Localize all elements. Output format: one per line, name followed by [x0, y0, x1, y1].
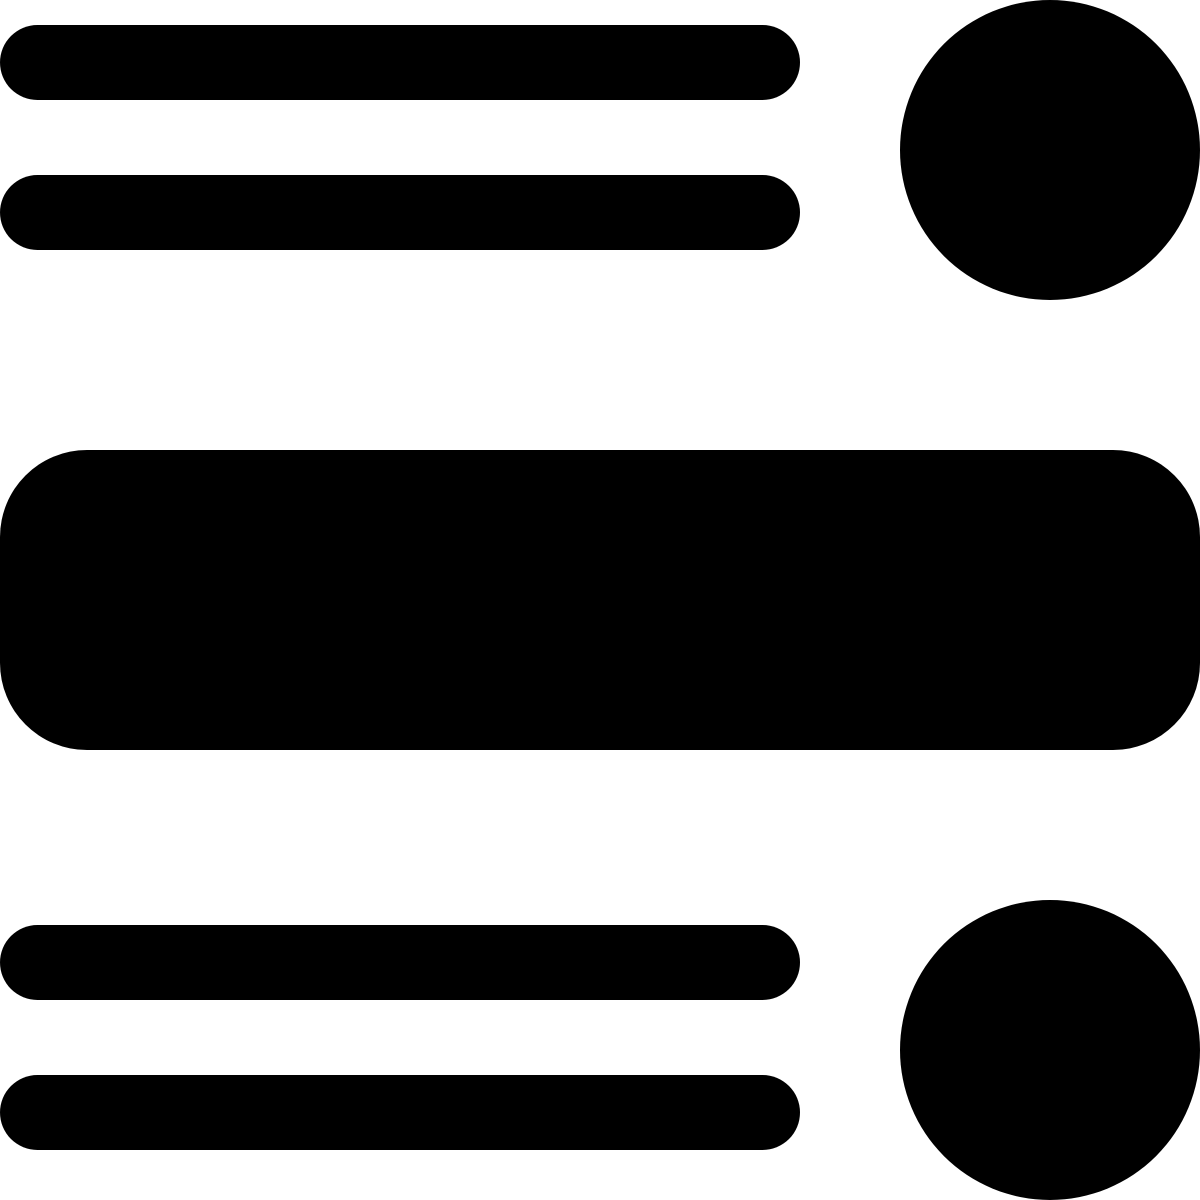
bottom line 2 — [0, 1075, 800, 1150]
central block — [0, 450, 1200, 750]
top circle — [900, 0, 1200, 300]
bottom circle — [900, 900, 1200, 1200]
top line 2 — [0, 175, 800, 250]
bottom line 1 — [0, 925, 800, 1000]
top line 1 — [0, 25, 800, 100]
